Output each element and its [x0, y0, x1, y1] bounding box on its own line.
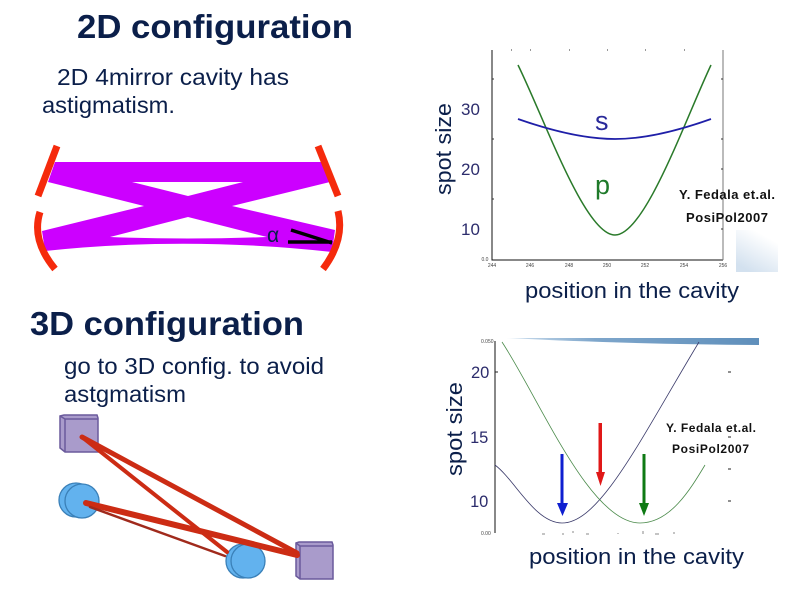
- citation: [666, 421, 756, 456]
- diagram: 2D four-mirror cavity: [38, 146, 340, 269]
- red arrow: [596, 423, 605, 486]
- cube mirror top left: [60, 415, 98, 452]
- tick marks bottom: [542, 531, 674, 535]
- y-axis numbers: 10: [461, 220, 480, 239]
- small axis labels: [481, 339, 494, 537]
- text: 3D configuration note: go to 3D config. to avoid: [64, 353, 324, 379]
- y-axis numbers: 20: [461, 160, 480, 179]
- x-axis tick labels: 252: [641, 263, 649, 269]
- x-axis tick labels: 256: [719, 263, 727, 269]
- chart: spot size s and p: [461, 50, 778, 272]
- axes: [492, 50, 723, 260]
- x-axis tick labels: 248: [565, 263, 573, 269]
- curve 1: [495, 342, 699, 523]
- title: 2D configuration: 2D configuration: [77, 8, 353, 45]
- citation: Y. Fedala et.al.: [666, 421, 756, 435]
- laser beam paths: [42, 162, 335, 252]
- round mirror left: [59, 483, 99, 518]
- citation: [679, 187, 775, 225]
- curve label s: s: [595, 106, 608, 136]
- y-axis numbers: [461, 100, 480, 239]
- x-axis tick labels: 246: [526, 263, 534, 269]
- title: 3D configuration: 3D configuration: [30, 305, 304, 342]
- y-axis label: spot size: spot size: [442, 382, 467, 476]
- citation: PosiPol2007: [686, 210, 768, 225]
- chart: spot size with three positions: [470, 338, 759, 537]
- x-axis tick labels: 250: [603, 263, 611, 269]
- citation: Y. Fedala et.al.: [679, 187, 775, 202]
- y-axis label: spot size: spot size: [431, 103, 456, 195]
- mirrors: [38, 146, 340, 269]
- x-axis tick labels: 244: [488, 263, 496, 269]
- y-axis numbers: 10: [470, 493, 488, 511]
- blue arrow: [557, 454, 568, 516]
- cube mirror bottom right: [296, 542, 333, 579]
- text: 2D cavity astigmatism note: 2D 4mirror cavity has: [57, 64, 289, 90]
- small axis labels: 0.00: [481, 531, 491, 537]
- small axis labels: 0.050: [481, 339, 494, 345]
- text: 2D cavity astigmatism note: astigmatism.: [42, 92, 175, 118]
- x-axis label: position in the cavity: position in the cavity: [525, 278, 739, 303]
- angle marker alpha: α: [267, 224, 279, 247]
- x-axis label: position in the cavity: position in the cavity: [529, 544, 744, 569]
- curve s: [518, 119, 711, 139]
- top band: [507, 338, 759, 345]
- text: 2D cavity astigmatism note: [42, 64, 289, 118]
- axis: [494, 341, 496, 533]
- laser beams: [82, 437, 297, 556]
- y-axis numbers: 15: [470, 429, 488, 447]
- x-axis tick labels: 0.0: [482, 257, 489, 263]
- curve 2: [502, 342, 705, 523]
- text: 3D configuration note: astgmatism: [64, 381, 186, 407]
- y-axis numbers: 30: [461, 100, 480, 119]
- y-axis numbers: 20: [471, 364, 489, 382]
- x-axis tick labels: [482, 257, 727, 269]
- diagram: 3D cavity: [59, 415, 333, 579]
- curve label p: p: [595, 170, 610, 200]
- text: 3D configuration note: [64, 353, 324, 407]
- angle marker alpha: [267, 224, 332, 247]
- x-axis tick labels: 254: [680, 263, 688, 269]
- citation: PosiPol2007: [672, 442, 749, 456]
- round mirror bottom: [226, 544, 265, 578]
- curve p: [518, 65, 711, 235]
- corner shade: [736, 230, 778, 272]
- y-axis numbers: [472, 366, 489, 507]
- green arrow: [639, 454, 649, 516]
